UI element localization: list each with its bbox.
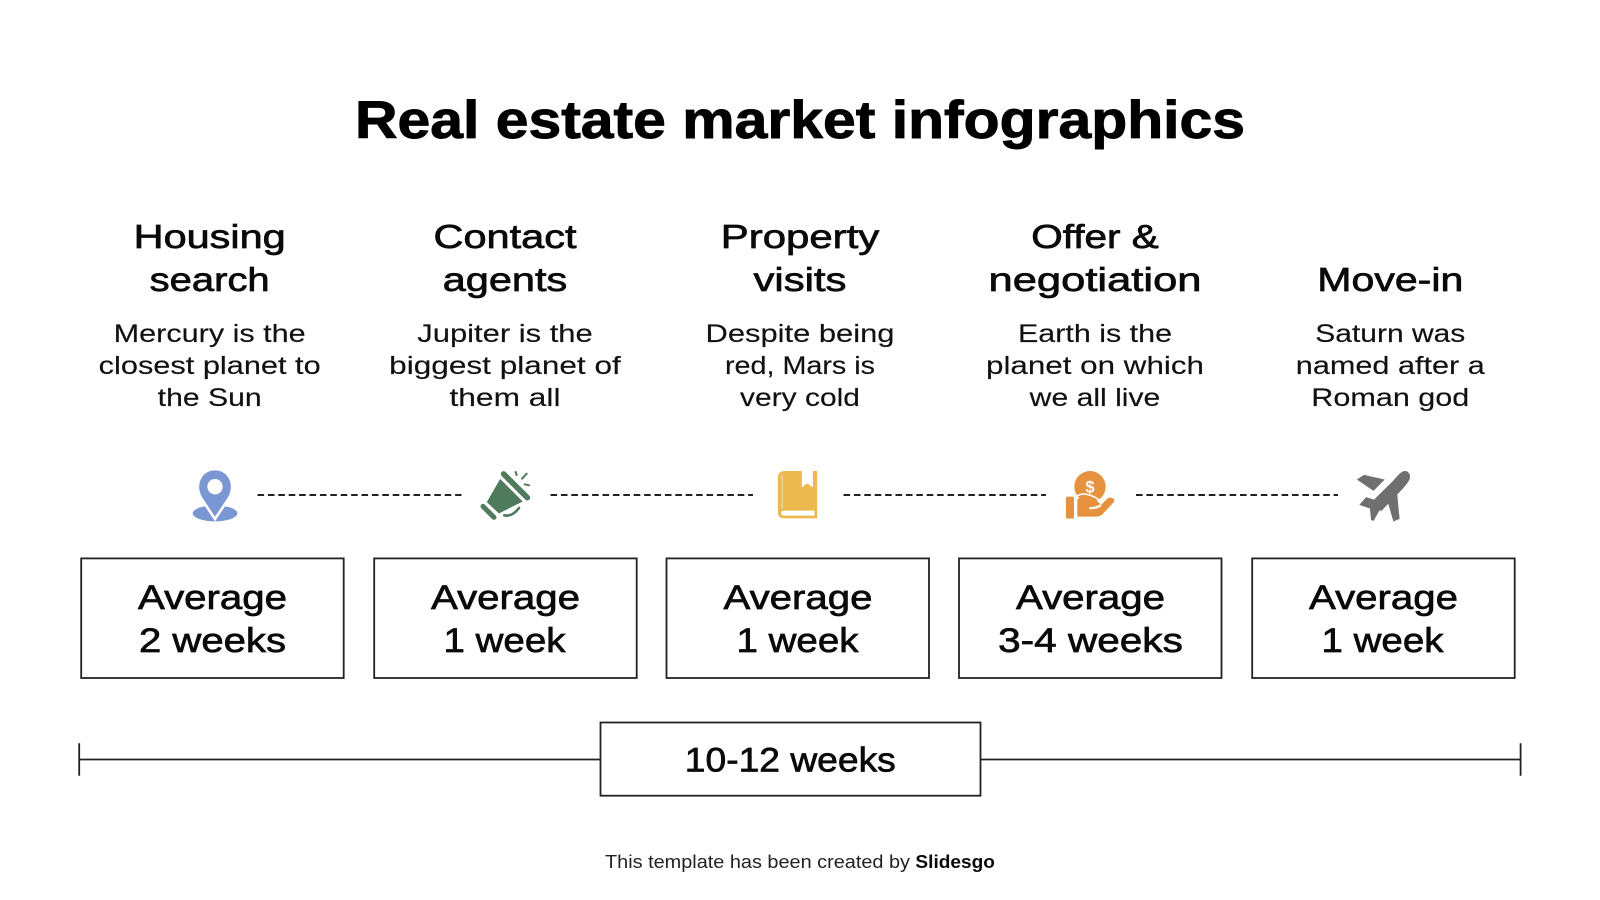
panel: average 1 week (agents): 1 week xyxy=(444,622,567,660)
connector: dashed line 4 xyxy=(1136,494,1338,496)
text: property visits description: red, Mars is xyxy=(725,352,875,380)
text: housing search description: closest planet to xyxy=(99,352,321,380)
panel: average 3-4 weeks xyxy=(959,558,1222,678)
text: offer description xyxy=(986,320,1204,412)
text: contact agents description: Jupiter is the xyxy=(417,320,593,348)
icon: book xyxy=(778,471,817,518)
icon: megaphone xyxy=(483,472,529,517)
panel: average 3-4 weeks: Average xyxy=(1016,579,1165,617)
panel: move-in text xyxy=(1296,261,1485,412)
connector: dashed line 3 xyxy=(844,494,1046,496)
heading: offer and negotiation xyxy=(988,218,1202,298)
text: housing search description: Mercury is the xyxy=(114,320,306,348)
panel: property visits text xyxy=(706,218,894,412)
heading: housing search: Housing xyxy=(134,218,286,255)
text: offer description: Earth is the xyxy=(1018,320,1172,348)
footer credit: This template has been created by xyxy=(605,852,910,872)
icon: hand holding coin: $ xyxy=(1085,478,1095,497)
text: offer description: we all live xyxy=(1028,384,1160,412)
text: property visits description: Despite being xyxy=(706,320,894,348)
text: housing search description xyxy=(99,320,321,412)
text: offer description: planet on which xyxy=(986,352,1204,380)
heading: property visits: Property xyxy=(721,218,880,255)
heading: contact agents: agents xyxy=(443,261,567,298)
timeline bar with total duration xyxy=(79,722,1521,796)
heading: housing search xyxy=(134,218,286,298)
heading: contact agents: Contact xyxy=(434,218,576,255)
connector: dashed line 2 xyxy=(550,494,753,496)
text: move-in description: Saturn was xyxy=(1315,320,1465,348)
text: property visits description xyxy=(706,320,894,412)
panel: average 1 week (move-in) xyxy=(1252,558,1515,678)
icon: airplane xyxy=(1357,471,1410,521)
text: move-in description: Roman god xyxy=(1311,384,1469,412)
heading: housing search: search xyxy=(150,261,270,298)
panel: average 2 weeks xyxy=(81,558,344,678)
heading: move-in: Move-in xyxy=(1317,261,1463,298)
text: contact agents description xyxy=(389,320,621,412)
panel: average 1 week (agents): Average xyxy=(431,579,580,617)
icon: location pin xyxy=(193,469,237,521)
text: move-in description: named after a xyxy=(1296,352,1485,380)
panel: average 3-4 weeks: 3-4 weeks xyxy=(998,622,1183,660)
panel: average 1 week (visits): 1 week xyxy=(736,622,860,660)
panel: average 1 week (agents) xyxy=(374,558,637,678)
title: Real estate market infographics xyxy=(355,91,1245,150)
connector: dashed line 1 xyxy=(258,494,462,496)
panel: contact agents text xyxy=(389,218,621,412)
panel: average 1 week (move-in): Average xyxy=(1309,579,1458,617)
text: contact agents description: biggest planet of xyxy=(389,352,621,380)
panel: average 2 weeks: 2 weeks xyxy=(139,622,286,660)
panel: offer and negotiation text xyxy=(986,218,1204,412)
panel: housing search text xyxy=(99,218,321,412)
heading: contact agents xyxy=(434,218,576,298)
timeline bar with total duration: 10-12 weeks xyxy=(685,742,896,780)
heading: property visits xyxy=(721,218,880,298)
icon: hand holding coin xyxy=(1066,471,1114,519)
heading: property visits: visits xyxy=(754,261,846,298)
heading: offer and negotiation: negotiation xyxy=(988,261,1202,298)
text: property visits description: very cold xyxy=(740,384,860,412)
text: move-in description xyxy=(1296,320,1485,412)
panel: average 2 weeks: Average xyxy=(138,579,287,617)
heading: offer and negotiation: Offer & xyxy=(1031,218,1159,255)
panel: average 1 week (visits) xyxy=(666,558,929,678)
panel: average 1 week (move-in): 1 week xyxy=(1322,622,1445,660)
text: housing search description: the Sun xyxy=(158,384,262,412)
text: contact agents description: them all xyxy=(450,384,560,412)
panel: average 1 week (visits): Average xyxy=(724,579,872,617)
footer credit: Slidesgo xyxy=(915,852,995,872)
